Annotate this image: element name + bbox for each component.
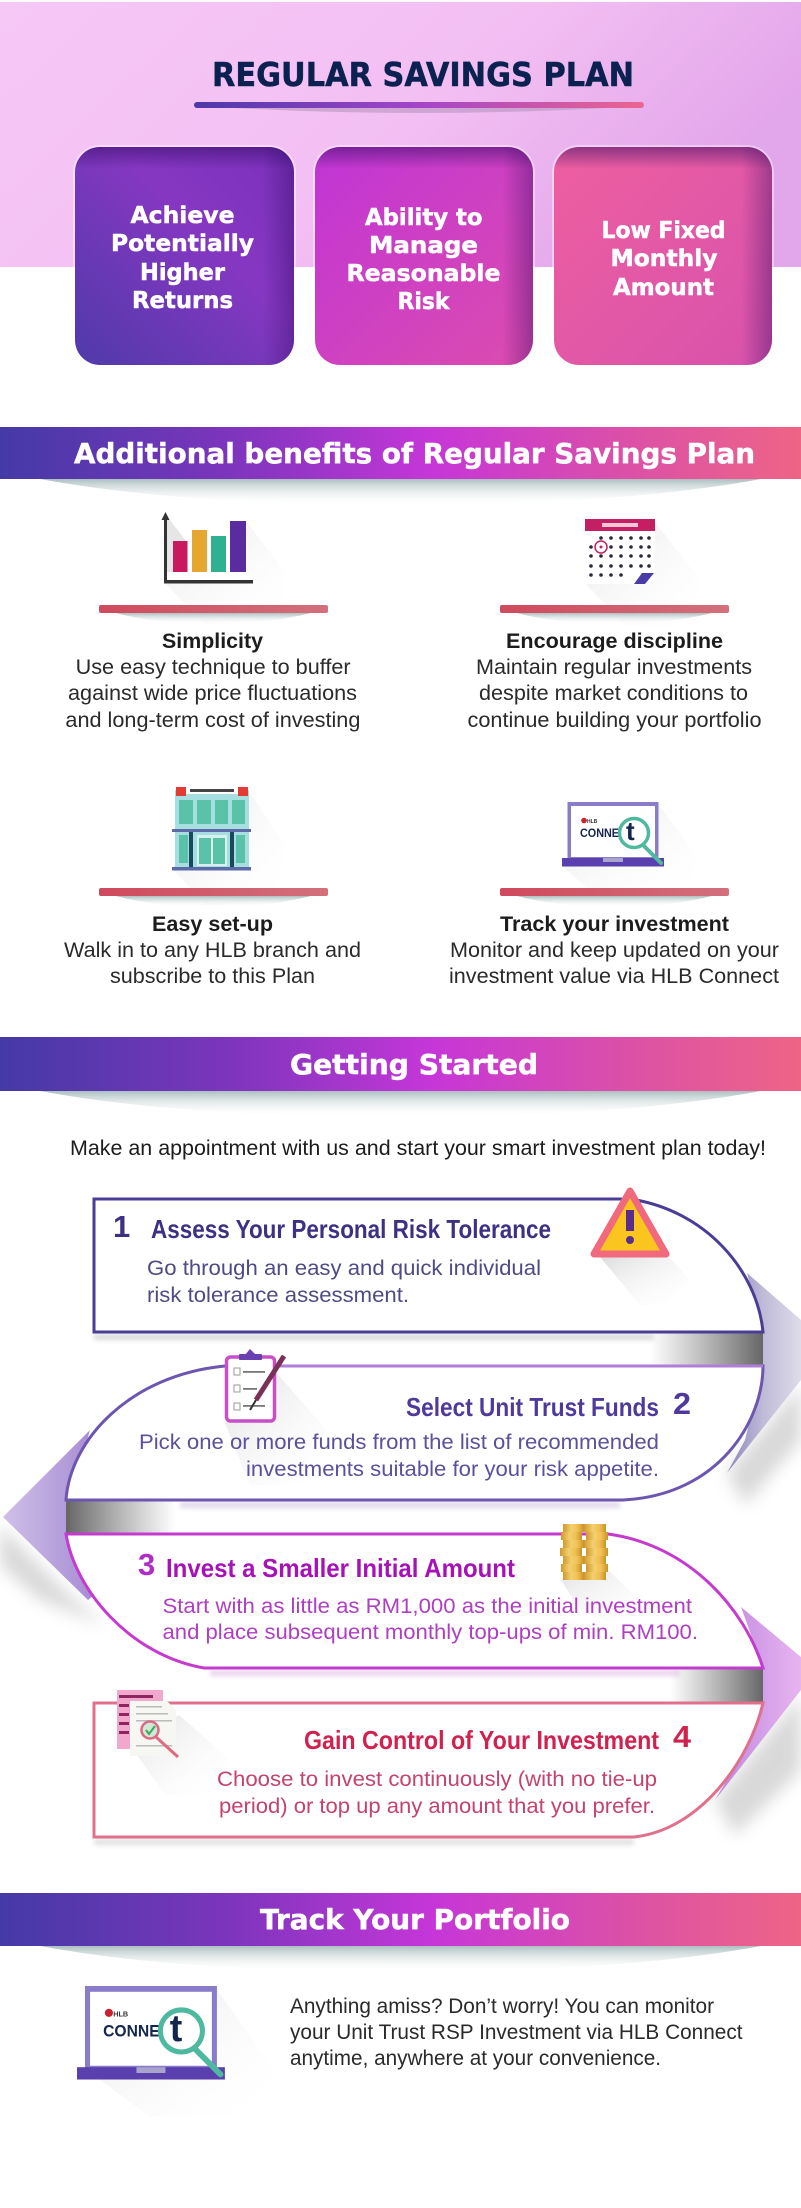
text: track your investment: investment value via HLB Connect <box>449 964 779 988</box>
text: encourage discipline: Maintain regular investments <box>476 655 752 679</box>
title: REGULAR SAVINGS PLAN <box>212 55 634 94</box>
icon: laptop with HLB Connect large: t <box>170 2007 183 2049</box>
card: low fixed amount <box>552 145 774 367</box>
divider: track investment <box>500 888 729 907</box>
card: manage risk: Manage <box>369 233 478 259</box>
card: higher returns: Potentially <box>111 231 254 257</box>
card: higher returns <box>73 145 296 367</box>
ribbon folds and shadows <box>0 1273 801 1845</box>
panel: step 2 select unit trust funds: Pick one or more funds from the list of recommended <box>139 1430 659 1454</box>
divider: discipline <box>500 605 729 624</box>
text: portfolio monitoring: your Unit Trust RSP Investment via HLB Connect <box>290 2020 743 2044</box>
icon: document with magnifier <box>117 1690 178 1757</box>
text: portfolio monitoring: Anything amiss? Don’t worry! You can monitor <box>290 1994 714 2018</box>
text: track your investment: Track your investment <box>500 912 729 936</box>
card: higher returns: Achieve <box>130 203 234 229</box>
text: encourage discipline: Encourage discipline <box>506 629 723 653</box>
text: simplicity: Use easy technique to buffer <box>76 655 351 679</box>
text: simplicity: against wide price fluctuations <box>68 681 357 705</box>
panel: step 2 select unit trust funds: Select Unit Trust Funds <box>406 1392 659 1422</box>
text: simplicity <box>65 629 360 732</box>
card: manage risk: Reasonable <box>346 261 500 287</box>
icon: coin stacks <box>560 1524 608 1580</box>
card: manage risk: Risk <box>398 289 450 315</box>
text: easy set-up <box>64 912 361 988</box>
card: manage risk <box>313 145 535 367</box>
text: track your investment: Monitor and keep updated on your <box>450 938 779 962</box>
card: higher returns: Returns <box>132 288 233 314</box>
intro sentence: Make an appointment with us and start your smart investment plan today! <box>70 1136 766 1160</box>
text: simplicity: and long-term cost of investing <box>65 708 360 732</box>
text: portfolio monitoring: anytime, anywhere at your convenience. <box>290 2046 661 2070</box>
banner: additional benefits <box>0 427 801 505</box>
banner: additional benefits: Additional benefits of Regular Savings Plan <box>74 437 755 470</box>
icon: laptop with HLB Connect: HLB <box>587 819 598 825</box>
panel: step 3 invest smaller amount: 3 <box>138 1547 155 1582</box>
header background panel <box>0 2 801 267</box>
text: encourage discipline <box>468 629 762 732</box>
icon: clipboard and pen <box>226 1349 284 1421</box>
divider: simplicity <box>99 605 328 624</box>
text: easy set-up: subscribe to this Plan <box>110 964 315 988</box>
panel: step 3 invest smaller amount <box>66 1534 763 1668</box>
banner: track your portfolio: Track Your Portfolio <box>260 1903 570 1936</box>
icon: laptop with HLB Connect large: CONNE <box>103 2021 160 2041</box>
panel: step 2 select unit trust funds: 2 <box>673 1386 691 1421</box>
panel: step 1 assess risk tolerance: risk tolerance assessment. <box>147 1283 409 1307</box>
icon: laptop with HLB Connect: CONNE <box>580 826 619 840</box>
panel: step 4 gain control: 4 <box>673 1719 692 1754</box>
icon: laptop with HLB Connect <box>562 802 697 897</box>
banner: getting started: Getting Started <box>290 1048 538 1081</box>
icon: warning triangle <box>594 1191 666 1254</box>
divider: easy set-up <box>99 888 328 907</box>
text: encourage discipline: despite market conditions to <box>479 681 748 705</box>
panel: step 1 assess risk tolerance: Go through an easy and quick individual <box>147 1256 541 1280</box>
card: manage risk: Ability to <box>365 205 482 231</box>
panel: step 1 assess risk tolerance: Assess Your Personal Risk Tolerance <box>151 1214 551 1244</box>
text: track your investment <box>449 912 779 988</box>
text: simplicity: Simplicity <box>162 629 263 653</box>
icon: bank branch <box>172 787 285 905</box>
panel: step 2 select unit trust funds: investments suitable for your risk appetite. <box>246 1457 659 1481</box>
card: low fixed amount: Amount <box>613 275 714 301</box>
panel: step 1 assess risk tolerance: 1 <box>113 1209 130 1244</box>
icon: laptop with HLB Connect large: HLB <box>113 2009 128 2018</box>
panel: step 4 gain control: Choose to invest continuously (with no tie-up <box>217 1767 657 1791</box>
panel: step 3 invest smaller amount: Start with as little as RM1,000 as the initial investment <box>162 1594 692 1618</box>
card: low fixed amount: Monthly <box>610 246 718 272</box>
panel: step 3 invest smaller amount: Invest a Smaller Initial Amount <box>166 1553 515 1583</box>
icon: bar chart <box>162 512 285 625</box>
card: higher returns: Higher <box>140 260 226 286</box>
panel: step 4 gain control: period) or top up any amount that you prefer. <box>219 1794 655 1818</box>
text: encourage discipline: continue building your portfolio <box>468 708 762 732</box>
title underline <box>194 102 644 113</box>
panel: step 4 gain control <box>94 1703 763 1837</box>
text: easy set-up: Easy set-up <box>152 912 273 936</box>
banner: track your portfolio <box>0 1893 801 1972</box>
panel: step 2 select unit trust funds <box>66 1366 763 1500</box>
icon: calendar <box>585 519 700 630</box>
panel: step 3 invest smaller amount: and place subsequent monthly top-ups of min. RM100. <box>162 1620 698 1644</box>
card: low fixed amount: Low Fixed <box>602 218 726 244</box>
panel: step 4 gain control: Gain Control of Your Investment <box>304 1725 659 1755</box>
icon: laptop with HLB Connect: t <box>626 816 635 846</box>
text: portfolio monitoring <box>290 1994 743 2070</box>
icon: laptop with HLB Connect large <box>77 1986 271 2116</box>
panel: step 1 assess risk tolerance <box>94 1199 763 1332</box>
banner: getting started <box>0 1037 801 1117</box>
text: easy set-up: Walk in to any HLB branch and <box>64 938 361 962</box>
